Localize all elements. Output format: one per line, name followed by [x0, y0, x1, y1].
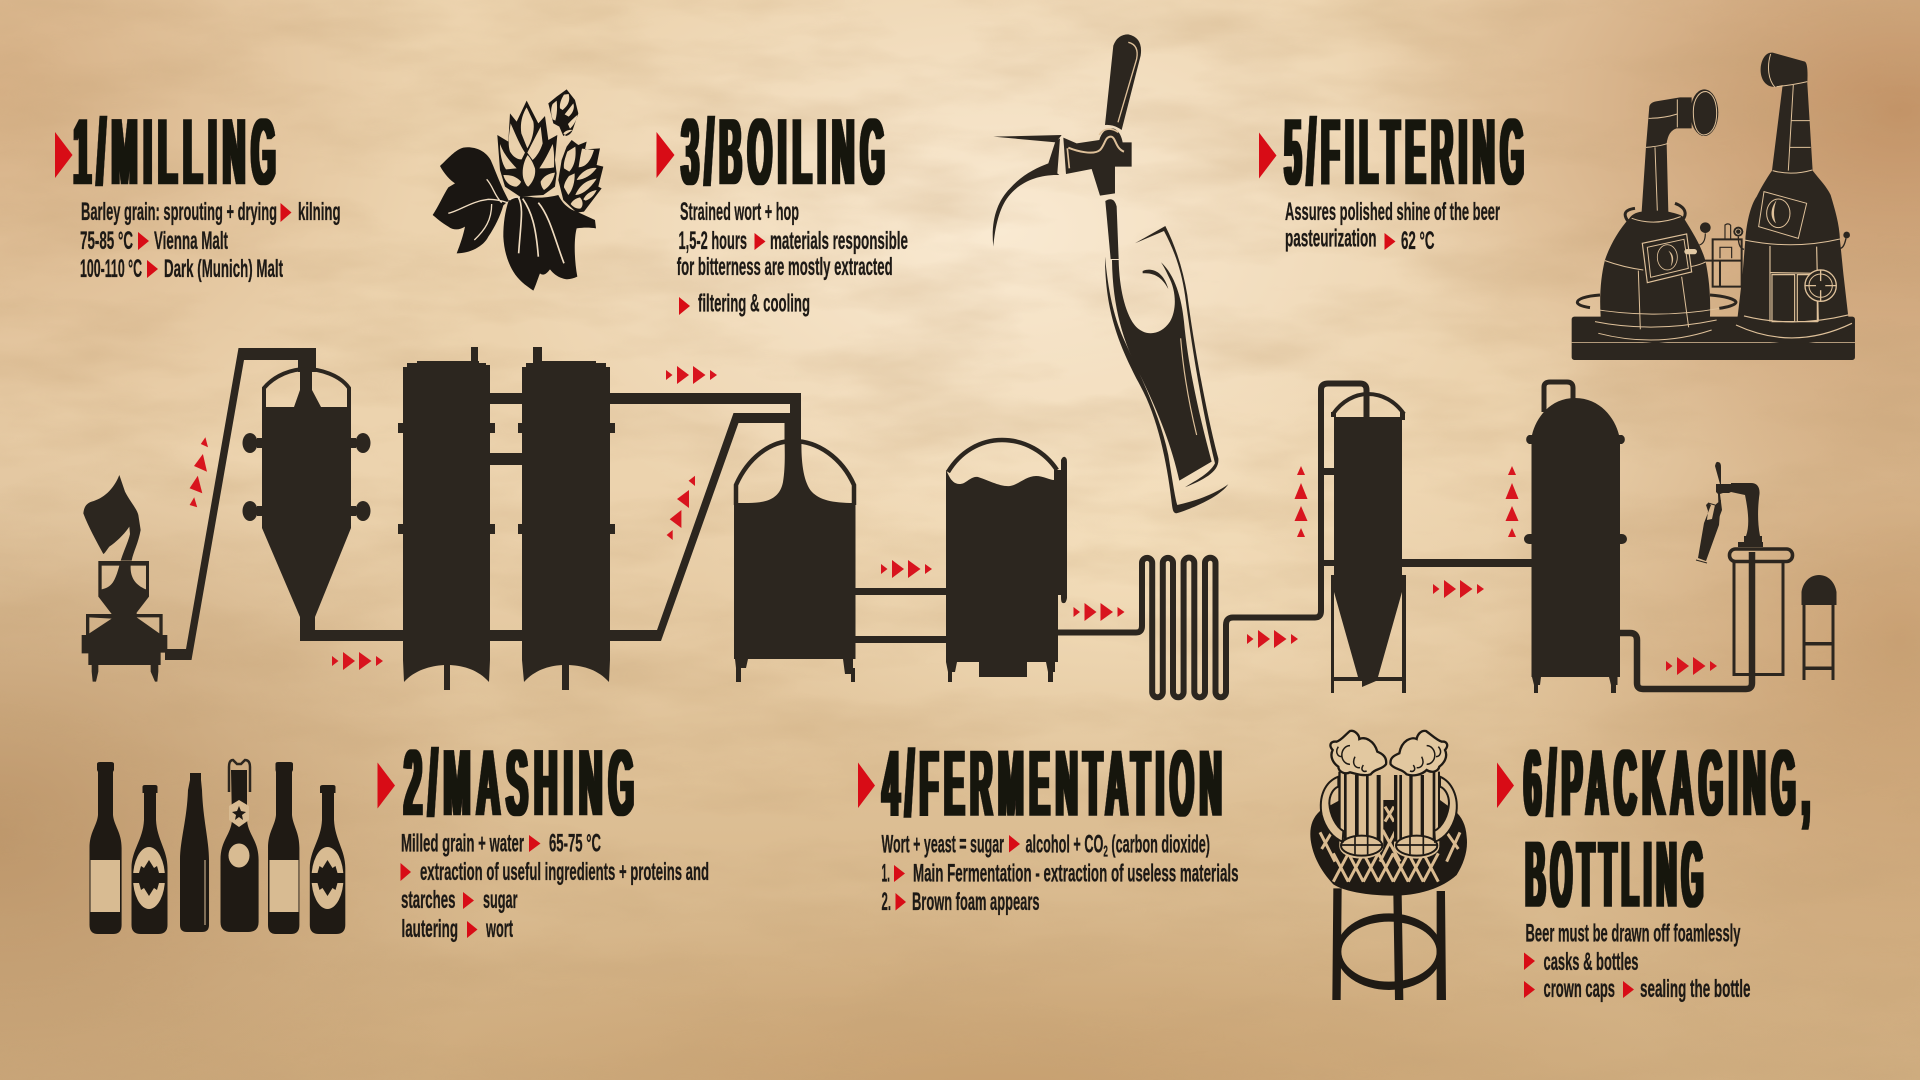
- text block: boiling details: filtering & cooling: [698, 290, 810, 318]
- icon: small stool: [1802, 575, 1836, 680]
- text block: milling details: Barley grain: sprouting + drying: [81, 198, 277, 226]
- text block: milling details: kilning: [298, 198, 340, 226]
- pipe: mash tun to kettle: [610, 393, 801, 641]
- text block: milling details: [80, 198, 340, 283]
- right still: [1733, 53, 1853, 344]
- right mug: [1394, 772, 1457, 859]
- fermentation tank: [1321, 394, 1406, 693]
- text block: packaging details: casks & bottles: [1544, 948, 1638, 976]
- bottle 3: [180, 773, 209, 932]
- pipe and cooling coil: [1058, 384, 1366, 697]
- text block: filtering details: [1285, 198, 1500, 255]
- text block: fermentation details: Main Fermentation - extraction of useless materials: [913, 860, 1238, 888]
- arrows: kettle to whirlpool: [881, 560, 932, 578]
- text block: milling details: Vienna Malt: [154, 227, 228, 255]
- boil kettle: [734, 440, 856, 682]
- hop leaf left: [433, 147, 509, 253]
- heading: 6/Packaging, Bottling: [1497, 730, 1816, 926]
- text block: milling details: 75-85 °C: [80, 227, 133, 255]
- text block: fermentation details: Wort + yeast = sugar: [882, 830, 1004, 858]
- glass outline: [1105, 257, 1228, 513]
- arrows: rising wort to kettle: [667, 476, 695, 540]
- table ring: [1336, 913, 1442, 990]
- mash tun A: [398, 347, 495, 690]
- text block: boiling details: [677, 198, 908, 318]
- bottle 5: [268, 762, 299, 934]
- text block: boiling details: 1,5-2 hours: [678, 227, 747, 255]
- text block: fermentation details: Brown foam appears: [912, 888, 1040, 916]
- base plate: [1572, 317, 1855, 360]
- flow arrows: red chevron groups: [190, 366, 1717, 675]
- heading: 2/Mashing: [378, 730, 640, 835]
- left still: [1577, 89, 1736, 343]
- arrows: mash tun to kettle: [666, 366, 717, 384]
- gauges and small pipework: [1699, 222, 1850, 287]
- text block: fermentation details: 1.: [882, 860, 890, 888]
- arrows: up pipe to fermentation: [1294, 466, 1308, 537]
- pipe: filter to tap stand: [1619, 552, 1752, 689]
- section 3: boiling: [656, 99, 908, 318]
- text block: mashing details: sugar: [483, 886, 518, 914]
- text block: mashing details: Milled grain + water: [401, 830, 524, 858]
- text block: fermentation details: alcohol + CO: [1026, 830, 1179, 858]
- top cone: [548, 89, 578, 136]
- beer in glass: [1112, 260, 1212, 481]
- leaf veins: [448, 179, 507, 240]
- text: 4/FERMENTATION: [882, 730, 1228, 836]
- text block: packaging details: crown caps: [1544, 975, 1615, 1003]
- arrows: mill tank to mash tun: [332, 652, 383, 670]
- right cone: [558, 140, 603, 213]
- heading: 1/Milling: [55, 99, 282, 204]
- arrows: whirlpool to coil: [1074, 603, 1124, 621]
- arrows: filter to tap: [1666, 657, 1717, 675]
- text block: packaging details: sealing the bottle: [1640, 975, 1751, 1003]
- text: 3/BOILING: [682, 99, 890, 204]
- section 1: milling: [55, 99, 340, 283]
- arrows: fermentation to filter: [1433, 580, 1484, 598]
- section 4: fermentation: [858, 730, 1238, 916]
- text block: boiling details: Strained wort + hop: [680, 198, 799, 226]
- bottle 1: [90, 762, 122, 934]
- arrows: coil to fermentation: [1247, 630, 1298, 648]
- pipes between mash tuns: [490, 393, 522, 641]
- text block: filtering details: pasteurization: [1285, 224, 1376, 252]
- mill tank: [242, 369, 403, 641]
- pipe: fermentation to filter: [1402, 559, 1532, 567]
- section 5: filtering: [1259, 99, 1530, 255]
- icon: grain hopper with pouring sack: [82, 475, 167, 682]
- whirlpool tank: [946, 440, 1067, 682]
- foam: [1330, 731, 1447, 775]
- bottle 6: [310, 785, 345, 934]
- pipes: kettle to whirlpool: [855, 588, 947, 643]
- arrows: up to filter: [1506, 466, 1518, 537]
- icon: small tap on stand: [1696, 462, 1792, 674]
- icon: table with two foaming beer mugs: [1310, 731, 1467, 1000]
- text block: mashing details: [400, 830, 709, 943]
- main cone: [497, 101, 557, 197]
- bottle 4: [220, 760, 259, 932]
- table legs: [1332, 888, 1446, 1000]
- section 2: mashing: [378, 730, 709, 943]
- text block: filtering details: 62 °C: [1401, 227, 1434, 255]
- filter tank: [1524, 382, 1627, 693]
- text block: packaging details: [1524, 920, 1751, 1003]
- glass highlights: [1181, 338, 1197, 435]
- text block: fermentation details: [882, 830, 1238, 916]
- text block: fermentation details: 2: [1103, 844, 1108, 860]
- icon: hop leaf and cones: [433, 89, 603, 291]
- text block: fermentation details: 2.: [882, 888, 891, 916]
- text: 2/MASHING: [404, 730, 640, 835]
- lattice pattern: [1320, 807, 1460, 882]
- icon: copper brewing stills: [1572, 53, 1855, 360]
- text block: fermentation details: (carbon dioxide): [1108, 830, 1210, 858]
- text block: mashing details: wort: [485, 915, 513, 943]
- icon: row of six beer bottles: [90, 760, 345, 934]
- heading: 4/Fermentation: [858, 730, 1228, 836]
- text block: milling details: 100-110 °C: [80, 255, 142, 283]
- text block: milling details: Dark (Munich) Malt: [164, 255, 283, 283]
- arrows: hopper to mill tank: [190, 437, 208, 507]
- text: 1/MILLING: [74, 99, 282, 204]
- heading: 3/Boiling: [656, 99, 890, 204]
- tap head and spout: [1063, 128, 1132, 196]
- icon: beer tap filling a glass: [993, 34, 1228, 513]
- section 6: packaging and bottling: [1497, 730, 1816, 1003]
- tap handle: [1105, 34, 1141, 130]
- text block: boiling details: materials responsible: [770, 227, 908, 255]
- beer stream: [1105, 199, 1119, 259]
- text block: mashing details: 65-75 °C: [549, 830, 601, 858]
- text block: mashing details: extraction of useful ingredients + proteins and: [420, 858, 709, 886]
- process chain: grain hopper, tanks, pipes: [82, 347, 1836, 697]
- text block: mashing details: lautering: [402, 915, 458, 943]
- mash tun B: [518, 347, 615, 690]
- text block: filtering details: Assures polished shine of the beer: [1285, 198, 1500, 226]
- hop leaf bottom: [503, 195, 596, 291]
- bottle 2: [132, 785, 168, 934]
- text block: mashing details: starches: [401, 886, 456, 914]
- heading: 5/Filtering: [1259, 99, 1530, 204]
- text block: boiling details: for bitterness are mostly extracted: [677, 253, 893, 281]
- left mug: [1321, 772, 1383, 859]
- pipe: hopper to mill tank: [165, 348, 316, 660]
- table top: [1310, 800, 1467, 896]
